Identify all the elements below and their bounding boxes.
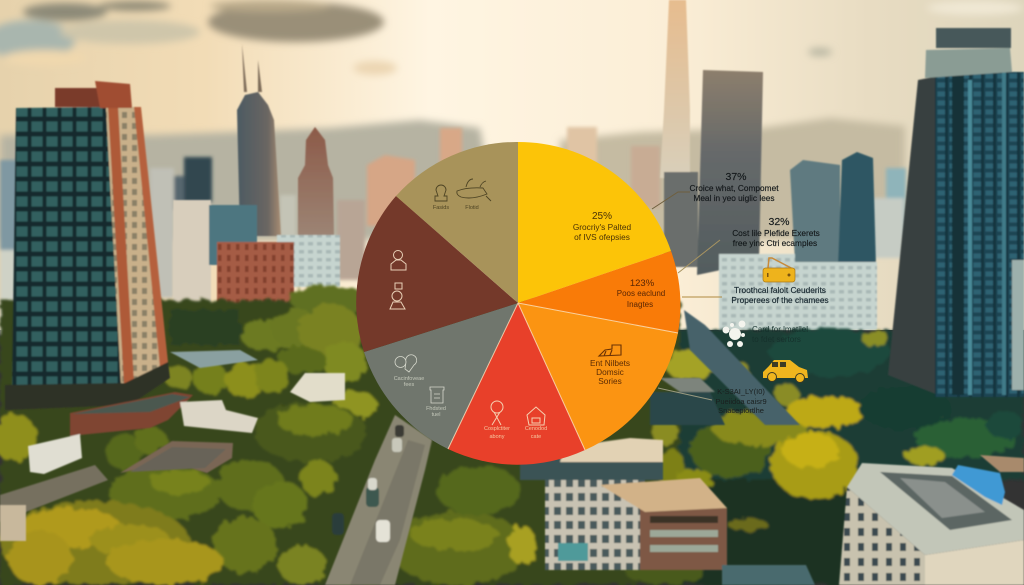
icon: white molecule	[722, 320, 746, 347]
streets	[0, 310, 800, 585]
low buildings, left	[0, 350, 345, 541]
label: red slice: abony	[490, 434, 505, 440]
right glass high-rise	[888, 28, 1024, 397]
label: dark orange slice: 123%	[630, 278, 655, 289]
label: red slice: Cenodod	[525, 426, 547, 432]
white rooftop building, bottom right	[839, 455, 1024, 585]
label: red slice: cate	[531, 434, 541, 440]
callout: tropical: Troothcal falolt Ceuderits	[734, 285, 826, 295]
slice: yellow 25%	[518, 142, 671, 303]
icon: yellow car	[763, 360, 808, 382]
callout: card text: to fdet sertors	[752, 335, 801, 344]
icon: olive slice symbols	[435, 179, 491, 201]
pie chart	[356, 142, 680, 465]
callout: card text: Card for lmatllel	[752, 325, 808, 334]
trees and ground	[0, 285, 1024, 585]
label: yellow slice: Grocriy's Palted	[573, 222, 632, 232]
callout: 32%	[732, 216, 820, 248]
label: dark orange slice	[617, 278, 665, 309]
label: grey slice: Fhdsted	[426, 406, 446, 412]
label: grey slice: tuel	[432, 412, 440, 418]
callout: 37%: Meal in yeo uiglic lees	[693, 193, 775, 203]
label: yellow slice: of IVS ofepsies	[574, 232, 630, 242]
label: red slice	[484, 426, 547, 440]
label: yellow slice: 25%	[592, 211, 612, 222]
label: dark orange slice: Inagtes	[627, 300, 653, 309]
callout: 32%: Cost lile Plefide Exerets	[732, 228, 820, 238]
label: red slice: Cosplctiter	[484, 426, 510, 432]
clouds	[0, 0, 1023, 75]
callout: bottom text: K-S3AI_LY(I0)	[717, 387, 765, 396]
callout: bottom text: Snacepiortlhe	[718, 406, 764, 415]
slice: light orange	[518, 303, 678, 450]
slice: dark orange 12%	[518, 251, 680, 333]
callout: 37%	[690, 171, 779, 203]
low buildings, centre bottom	[520, 438, 815, 585]
callout: 32%: 32%	[768, 216, 790, 228]
label: yellow slice	[573, 211, 632, 242]
label: grey slice: Cacinfoveae	[394, 376, 424, 382]
left brick high-rise	[5, 81, 170, 410]
callout: 37%: 37%	[725, 171, 747, 183]
icon: house	[527, 407, 545, 425]
callout: bottom text: Pueiidoa caisr9	[715, 397, 767, 406]
icon: people in brown slice	[390, 250, 406, 309]
callout: tropical: Properees of the chamees	[731, 295, 829, 305]
label: light orange slice: Ent Nilbets	[590, 358, 630, 368]
label: dark orange slice: Poos eaclund	[617, 289, 665, 298]
callout: card text	[752, 325, 808, 344]
label: light orange slice	[590, 358, 630, 386]
label: grey slice: fees	[404, 382, 414, 388]
slice: olive	[396, 142, 518, 303]
callout: tropical	[731, 285, 829, 305]
slice: grey	[364, 303, 518, 449]
label: grey slice	[394, 376, 446, 418]
slice: brown	[356, 196, 518, 352]
icon: shoe	[599, 345, 621, 356]
slice: red	[448, 303, 585, 465]
label: light orange slice: Domsic	[596, 367, 624, 377]
icon: pills	[395, 355, 417, 372]
icon: jar	[430, 387, 444, 403]
callout: 32%: free yinc Ctri ecamples	[733, 238, 817, 248]
skyline towers	[173, 0, 877, 330]
leader lines	[652, 192, 722, 400]
label: olive slice: Fasids	[433, 205, 449, 211]
icon: person outline	[491, 401, 503, 425]
callout: 37%: Croice what, Compomet	[690, 183, 779, 193]
far haze buildings	[0, 127, 906, 335]
sky background	[0, 0, 1024, 330]
label: olive slice: Flotid	[465, 205, 479, 211]
slice separators	[448, 303, 678, 450]
label: olive slice	[433, 205, 479, 211]
icon: yellow tag	[763, 258, 795, 282]
distant hills	[0, 118, 905, 240]
label: light orange slice: Sories	[598, 376, 622, 386]
callout: bottom text	[715, 387, 767, 415]
